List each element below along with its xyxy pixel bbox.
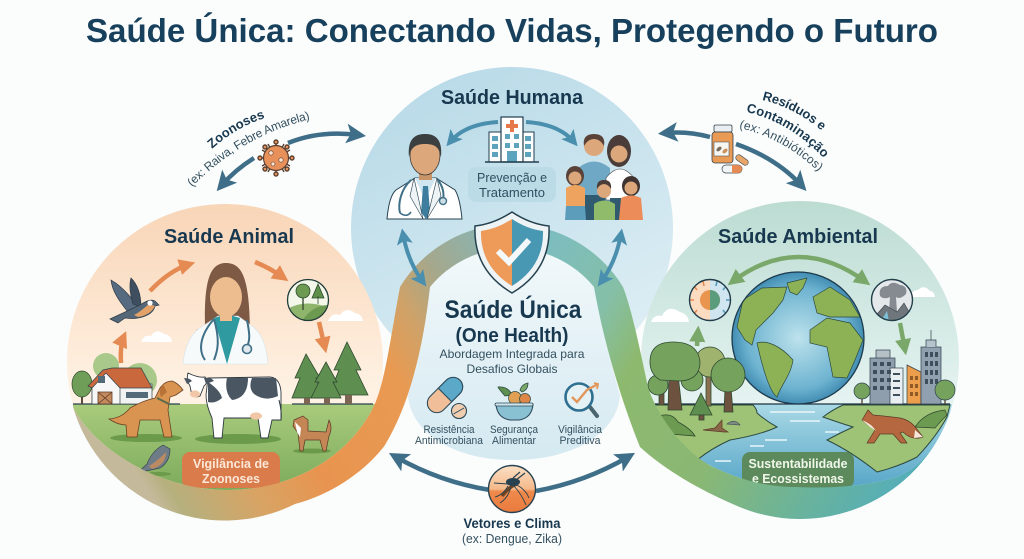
- labels: challenges: [415, 424, 603, 447]
- link: resíduos e contaminação: [658, 92, 828, 191]
- panel: saúde animal: [67, 204, 383, 520]
- icon: hospital: [485, 117, 539, 162]
- arrow: to human: [666, 132, 710, 137]
- clouds: [651, 287, 935, 322]
- labels: challenges: Vigilância: [558, 424, 603, 436]
- icon: pollution cloud circle: [870, 280, 915, 322]
- icon: magnifier with check: [566, 383, 598, 416]
- icon: virus: [258, 140, 294, 176]
- arrow: human to animal double arrow: [403, 234, 423, 282]
- labels: challenges: Preditiva: [560, 435, 601, 447]
- clouds: [141, 310, 363, 342]
- icon: medicine bottle: [712, 125, 749, 173]
- text: resíduos e: Resíduos e: [762, 92, 825, 130]
- icon: food bowl: [495, 383, 533, 420]
- arrow: to animal: [222, 158, 254, 185]
- text: dengue and zika example: (ex: Dengue, Zika): [462, 531, 562, 546]
- cycle arrows: [121, 262, 325, 363]
- icon: doctor: [387, 134, 462, 219]
- arrow: to environment: [536, 457, 628, 491]
- icon: small dog: [293, 416, 331, 454]
- connecting band: animal side: [73, 224, 512, 521]
- river banks: [650, 405, 950, 472]
- icon: farm barn: [72, 353, 157, 404]
- icon: capsule and pill: [423, 373, 467, 418]
- label: vigilância de zoonoses: Zoonoses: [202, 472, 260, 486]
- text: antibiotics example: (ex: Antibióticos): [740, 120, 822, 172]
- label: vigilância de zoonoses: Vigilância de: [193, 457, 269, 471]
- water highlights: [715, 412, 839, 461]
- arrow: to animal: [396, 457, 490, 490]
- icon: bush: [915, 410, 947, 428]
- central light disc: [408, 244, 620, 460]
- icon: city buildings: [854, 330, 955, 404]
- icon: pine trees: [292, 342, 368, 404]
- text: zoonoses examples: (ex: Raiva, Febre Amarela): [188, 112, 309, 187]
- label: sustentabilidade e ecossistemas: [742, 452, 854, 488]
- icon: sun and ice climate circle: [689, 280, 731, 320]
- arrows: hospital to people: [450, 122, 574, 142]
- labels: challenges: Resistência: [424, 424, 475, 436]
- icon: mosquito: [488, 466, 536, 512]
- panel: saúde humana: [351, 67, 673, 389]
- label: prevenção e tratamento: [468, 167, 556, 202]
- ground line: [650, 403, 950, 405]
- icon: flying bird: [110, 278, 159, 323]
- arrow: to environment: [736, 144, 801, 185]
- cycle arrows: [697, 257, 905, 350]
- link: zoonoses: [188, 112, 366, 191]
- labels: challenges: Segurança: [490, 424, 539, 436]
- text: zoonoses: Zoonoses: [206, 112, 264, 149]
- icon: dog: [109, 381, 183, 442]
- icon: family: [565, 134, 643, 220]
- icon: fox: [862, 410, 923, 443]
- icon: small bird: [135, 445, 171, 476]
- panel: saúde única: [415, 294, 603, 447]
- label: vigilância de zoonoses: [182, 452, 280, 488]
- title: Saúde Única: Conectando Vidas, Protegendo o Futuro: [86, 12, 938, 50]
- ground line: [73, 403, 373, 405]
- heading: saúde ambiental: Saúde Ambiental: [718, 226, 878, 248]
- icon: veterinarian: [183, 263, 268, 364]
- icon: central shield: [475, 212, 549, 293]
- link: vetores e clima: [396, 457, 628, 546]
- label: sustentabilidade e ecossistemas: Sustentabilidade: [748, 457, 848, 471]
- text: abordagem integrada: Abordagem Integrada para: [440, 347, 585, 361]
- label: sustentabilidade e ecossistemas: e Ecossistemas: [752, 472, 844, 486]
- icon: forest trees: [648, 342, 745, 436]
- panel: saúde ambiental: [641, 201, 959, 519]
- labels: challenges: Alimentar: [492, 435, 536, 447]
- icon: landscape circle: [285, 280, 330, 325]
- label: prevenção e tratamento: Tratamento: [479, 186, 545, 200]
- heading: saúde humana: Saúde Humana: [441, 87, 584, 109]
- icon: cow: [184, 373, 281, 444]
- heading: saúde única: Saúde Única: [444, 294, 582, 324]
- text: abordagem integrada: [440, 347, 585, 376]
- grass: [73, 404, 378, 490]
- connecting band: environment side: [512, 224, 950, 519]
- labels: challenges: Antimicrobiana: [415, 435, 484, 447]
- text: vetores e clima: Vetores e Clima: [464, 515, 561, 531]
- water: [652, 404, 952, 488]
- text: contaminação: Contaminação: [747, 104, 828, 157]
- icon: globe: [732, 272, 864, 404]
- arrow: to human: [288, 134, 358, 143]
- label: prevenção e tratamento: Prevenção e: [477, 171, 547, 185]
- heading: saúde animal: Saúde Animal: [164, 226, 294, 248]
- subheading: one health: (One Health): [456, 324, 568, 347]
- text: abordagem integrada: Desafios Globais: [466, 362, 558, 376]
- arrow: human to environment double arrow: [601, 234, 621, 282]
